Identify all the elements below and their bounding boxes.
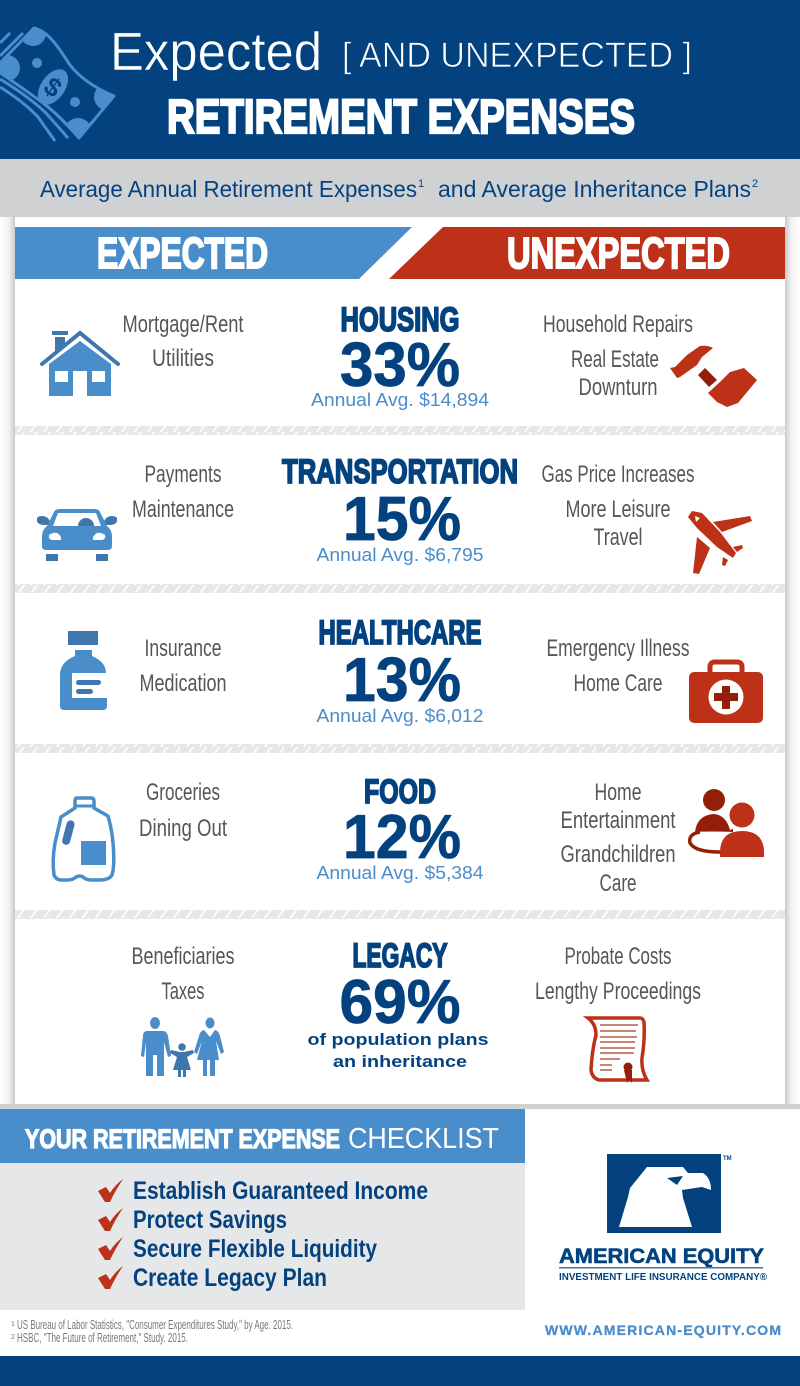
logo: American Equity: AMERICAN EQUITY bbox=[559, 1244, 764, 1268]
unexpected items bbox=[543, 311, 693, 401]
footnotes bbox=[11, 1317, 293, 1345]
stat: legacy bbox=[308, 937, 488, 1071]
stat: legacy: of population plans bbox=[308, 1030, 488, 1049]
footnotes: 1 bbox=[11, 1321, 15, 1328]
expected items: Maintenance bbox=[132, 496, 234, 523]
icon: family group bbox=[690, 789, 764, 857]
expected items: Mortgage/Rent bbox=[122, 311, 244, 338]
unexpected items: Travel bbox=[594, 524, 642, 551]
check item 2 bbox=[98, 1206, 287, 1234]
footnotes: US Bureau of Labor Statistics, "Consumer Expenditures Study," by Age. 2015. bbox=[17, 1317, 293, 1332]
unexpected items bbox=[560, 779, 676, 897]
stat: food bbox=[316, 773, 484, 883]
title: Expected bbox=[110, 22, 322, 82]
heading: unexpected bbox=[389, 227, 785, 279]
panel: checklist bbox=[0, 1109, 525, 1310]
unexpected items bbox=[546, 635, 690, 697]
unexpected items: Downturn bbox=[578, 374, 658, 401]
icon: hammer in hand bbox=[670, 346, 757, 407]
unexpected items: Care bbox=[600, 870, 636, 897]
check item 1: Establish Guaranteed Income bbox=[133, 1177, 428, 1205]
expected items: Insurance bbox=[144, 635, 222, 662]
title: [ AND UNEXPECTED ] bbox=[342, 36, 692, 75]
stat: transportation: Annual Avg. $6,795 bbox=[316, 545, 484, 565]
stat: transportation bbox=[282, 453, 518, 565]
icon: family bbox=[141, 1017, 224, 1077]
expected items: Beneficiaries bbox=[132, 943, 234, 970]
row: transportation bbox=[37, 453, 752, 574]
website: WWW.AMERICAN-EQUITY.COM bbox=[545, 1322, 781, 1338]
stat: healthcare: HEALTHCARE bbox=[318, 614, 482, 652]
stat: transportation: 15% bbox=[343, 485, 461, 554]
subtitle band: 1 bbox=[418, 178, 424, 190]
row: healthcare bbox=[60, 614, 763, 726]
unexpected items: Grandchildren bbox=[560, 841, 676, 868]
unexpected items: Gas Price Increases bbox=[542, 461, 694, 488]
stat: healthcare bbox=[316, 614, 484, 726]
unexpected items: Home bbox=[594, 779, 642, 806]
subtitle band: 2 bbox=[752, 178, 758, 190]
stat: legacy: 69% bbox=[340, 968, 460, 1037]
icon: eagle bbox=[619, 1167, 711, 1227]
header banner bbox=[0, 0, 800, 159]
stat: housing: 33% bbox=[340, 331, 460, 400]
subtitle band: and Average Inheritance Plans bbox=[438, 176, 751, 202]
unexpected items: Household Repairs bbox=[543, 311, 693, 338]
icon: money bill bbox=[0, 26, 116, 142]
title bbox=[110, 22, 692, 144]
unexpected items: Emergency Illness bbox=[546, 635, 690, 662]
row: food bbox=[53, 773, 764, 897]
stat: legacy: an inheritance bbox=[333, 1052, 467, 1071]
icon: first aid kit bbox=[689, 662, 763, 723]
check item 4: Create Legacy Plan bbox=[133, 1264, 327, 1292]
subtitle band: Average Annual Retirement Expenses bbox=[40, 176, 417, 202]
subtitle band bbox=[0, 159, 800, 217]
icon: house bbox=[42, 331, 118, 396]
icon: car bbox=[37, 509, 117, 561]
expected items: Utilities bbox=[152, 345, 214, 372]
icon: milk jug bbox=[53, 798, 114, 880]
expected items: Groceries bbox=[146, 779, 220, 806]
unexpected items: Probate Costs bbox=[564, 943, 672, 970]
expected items: Dining Out bbox=[139, 815, 227, 842]
check item 2: Protect Savings bbox=[133, 1206, 287, 1234]
unexpected items: Entertainment bbox=[560, 807, 676, 834]
expected items: Medication bbox=[140, 670, 226, 697]
panel: main table bbox=[0, 217, 800, 1109]
logo: American Equity bbox=[559, 1154, 768, 1283]
footnotes: HSBC, "The Future of Retirement," Study. 2015. bbox=[17, 1330, 188, 1345]
expected items: Payments bbox=[144, 461, 222, 488]
expected items bbox=[140, 635, 226, 697]
checklist heading bbox=[0, 1109, 525, 1163]
checklist heading: CHECKLIST bbox=[348, 1123, 499, 1155]
icon: airplane bbox=[688, 511, 752, 574]
check item 3: Secure Flexible Liquidity bbox=[133, 1235, 377, 1263]
stat: food: Annual Avg. $5,384 bbox=[316, 863, 484, 883]
unexpected items: Real Estate bbox=[571, 346, 659, 373]
row: legacy bbox=[132, 937, 701, 1083]
expected items: Taxes bbox=[162, 978, 204, 1005]
unexpected items bbox=[535, 943, 701, 1005]
row: housing bbox=[42, 301, 757, 410]
stat: food: 12% bbox=[343, 803, 461, 872]
icon: money bill: $ bbox=[38, 71, 68, 104]
checklist heading: YOUR RETIREMENT EXPENSE bbox=[25, 1124, 340, 1154]
stat: transportation: TRANSPORTATION bbox=[282, 453, 518, 491]
icon: legal scroll bbox=[588, 1018, 647, 1083]
unexpected items: Lengthy Proceedings bbox=[535, 978, 701, 1005]
stat: housing: Annual Avg. $14,894 bbox=[311, 390, 489, 410]
heading: expected: EXPECTED bbox=[97, 229, 268, 278]
expected items bbox=[139, 779, 227, 842]
footnotes: 2 bbox=[11, 1334, 15, 1341]
unexpected items bbox=[542, 461, 694, 551]
logo: American Equity: INVESTMENT LIFE INSURANCE COMPANY® bbox=[559, 1272, 768, 1283]
expected items bbox=[132, 461, 234, 523]
stat: housing: HOUSING bbox=[340, 301, 460, 339]
stat: healthcare: Annual Avg. $6,012 bbox=[316, 706, 484, 726]
expected items bbox=[122, 311, 244, 372]
logo: American Equity: TM bbox=[723, 1156, 732, 1162]
title: RETIREMENT EXPENSES bbox=[167, 91, 635, 144]
unexpected items: More Leisure bbox=[566, 496, 670, 523]
stat: food: FOOD bbox=[364, 773, 436, 811]
stat: legacy: LEGACY bbox=[352, 937, 448, 975]
unexpected items: Home Care bbox=[574, 670, 662, 697]
icon: medicine bottle bbox=[60, 631, 107, 710]
heading: expected bbox=[15, 227, 412, 279]
heading: unexpected: UNEXPECTED bbox=[507, 229, 730, 278]
stat: healthcare: 13% bbox=[343, 646, 461, 715]
footer bar bbox=[0, 1356, 800, 1386]
stat: housing bbox=[311, 301, 489, 410]
expected items bbox=[132, 943, 234, 1005]
